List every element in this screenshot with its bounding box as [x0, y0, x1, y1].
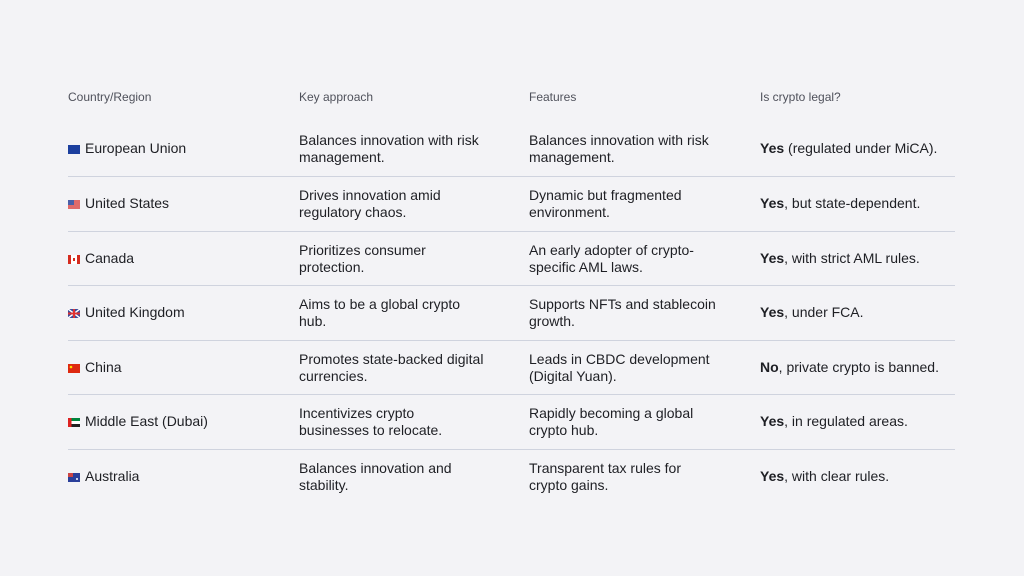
row: Middle East: Yes, in regulated areas.	[760, 413, 908, 429]
row: China	[68, 351, 939, 384]
row: Middle East: businesses to relocate.	[299, 422, 442, 438]
row: China: No, private crypto is banned.	[760, 359, 939, 375]
row: United States: United States	[85, 195, 169, 211]
row: European Union: European Union	[85, 140, 186, 156]
row: Middle East: Incentivizes crypto	[299, 405, 414, 421]
row: United Kingdom: Yes, under FCA.	[760, 304, 864, 320]
row: United States: Drives innovation amid regulatory chaos.	[299, 187, 441, 220]
row: Canada	[68, 242, 920, 275]
row: Canada: An early adopter of crypto-specific AML laws.	[529, 242, 694, 275]
row: United Kingdom	[68, 296, 864, 329]
row: European Union	[68, 132, 937, 165]
row: United States: Yes, but state-dependent.	[760, 195, 920, 211]
row: United Kingdom: United Kingdom	[85, 304, 185, 320]
row: United States	[68, 187, 920, 220]
row: Canada: Prioritizes consumer protection.	[299, 242, 426, 275]
row: Australia: Yes, with clear rules.	[760, 468, 889, 484]
row: Australia: Australia	[85, 468, 139, 484]
row: United States: Dynamic but fragmented environment.	[529, 187, 682, 220]
row: European Union: Yes (regulated under MiCA).	[760, 140, 937, 156]
row: Australia: Balances innovation and stability.	[299, 460, 452, 493]
text: Country/Region	[68, 90, 151, 104]
row: European Union: Balances innovation with risk management.	[299, 132, 479, 165]
row: Middle East	[68, 405, 908, 438]
row: China: China	[85, 359, 122, 375]
text: Is crypto legal?	[760, 90, 841, 104]
row: China: Promotes state-backed digital currencies.	[299, 351, 483, 384]
row: China: Leads in CBDC development (Digital Yuan).	[529, 351, 710, 384]
row: Middle East: Rapidly becoming a global crypto hub.	[529, 405, 693, 438]
row: Canada: Yes, with strict AML rules.	[760, 250, 920, 266]
row: European Union: Balances innovation with risk management.	[529, 132, 709, 165]
row: Middle East: Middle East (Dubai)	[85, 413, 208, 429]
row: United Kingdom: Supports NFTs and stablecoin growth.	[529, 296, 716, 329]
row: Australia: Transparent tax rules for crypto gains.	[529, 460, 681, 493]
row: Canada: Canada	[85, 250, 134, 266]
text: Key approach	[299, 90, 373, 104]
text: Features	[529, 90, 576, 104]
row: United Kingdom: Aims to be a global crypto hub.	[299, 296, 460, 329]
row: Australia	[68, 460, 889, 493]
table header	[68, 90, 841, 104]
